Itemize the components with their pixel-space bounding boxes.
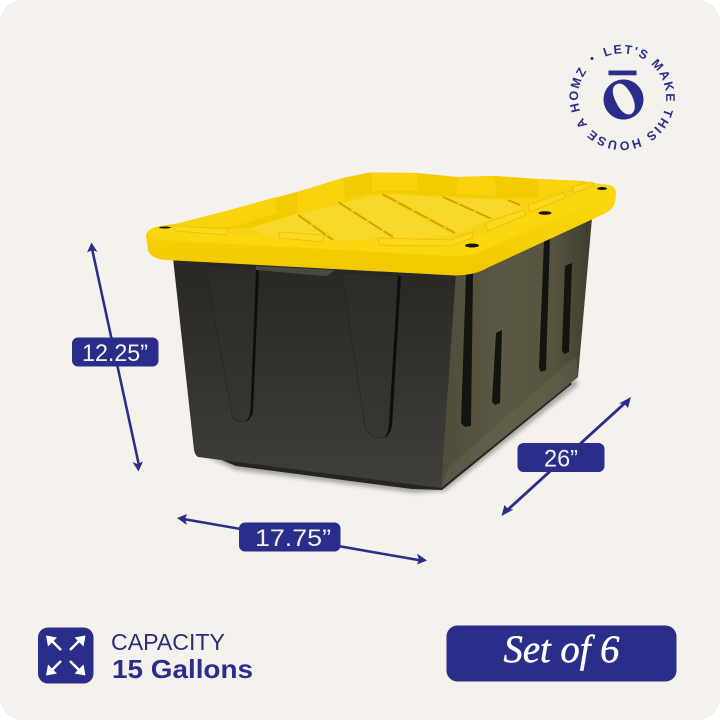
front left wedge shadow line [246,270,259,422]
bin base [212,380,572,490]
dimension: height [72,242,158,472]
badge dot [590,57,594,60]
set of 6 badge: Set of 6 [504,628,620,671]
storage bin photo [146,172,616,493]
dimension: height: 12.25” [82,340,148,367]
height label [72,338,158,366]
badge ring [604,80,644,120]
side grooves [461,272,473,427]
yellow lid top [172,172,600,242]
bin front wall [173,258,456,488]
bin shadow [205,378,578,493]
dimension: depth [502,397,631,516]
front left wedge [205,265,257,422]
capacity label: CAPACITY [111,629,225,655]
bin side wall [441,218,592,488]
lid recessed panels [250,194,525,241]
width label [239,522,340,552]
lid rim flat surface [148,183,615,256]
badge circular text: LET'S MAKE THIS HOUSE A HOMZ [569,44,675,150]
lid latch [256,266,335,276]
lid panel grooves [298,194,520,240]
capacity value: 15 Gallons [112,654,253,684]
width arrow [177,514,427,564]
capacity block [38,628,253,684]
dimension: depth: 26” [544,446,578,472]
depth label [518,443,604,472]
lid holes [159,187,607,248]
badge bar [608,70,636,75]
lid back wall [172,172,590,229]
capacity icon [38,628,94,684]
logo badge [569,44,675,150]
front right wedge shadow line [385,276,401,438]
yellow lid band [146,184,616,276]
depth arrow [502,397,631,516]
height arrow [87,242,143,472]
dimension: width: 17.75” [255,525,331,552]
lid wall bright blocks [172,173,583,228]
set of 6 badge [446,626,676,682]
side lower lit band [441,356,578,488]
lid handles [172,182,594,246]
front right wedge [342,273,400,438]
dimension: width [177,514,427,564]
